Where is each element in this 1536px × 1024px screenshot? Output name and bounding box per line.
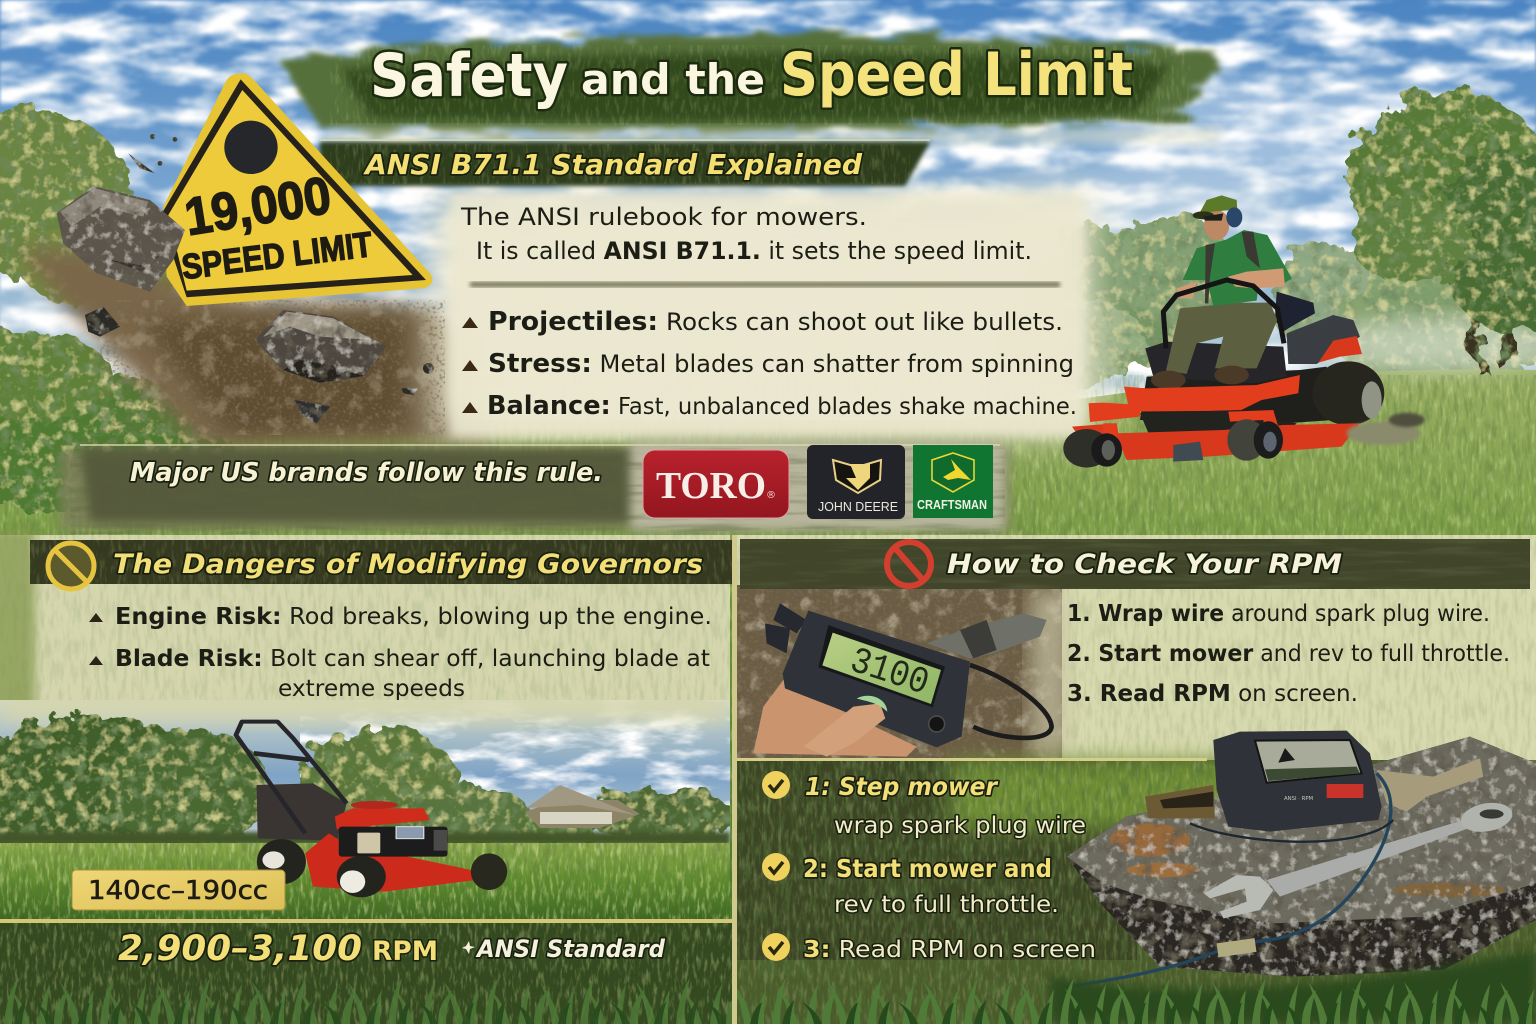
bullet: blade risk xyxy=(89,646,710,702)
bullet: stress: Stress: Metal blades can shatter from spinning xyxy=(488,349,1074,379)
RPM unit: RPM xyxy=(372,936,438,967)
title text: Safety xyxy=(370,41,568,111)
hazy tree line behind rider xyxy=(995,215,1536,390)
thumb xyxy=(803,703,885,757)
bush left xyxy=(0,110,230,510)
warning sign xyxy=(160,73,432,306)
riding mower with operator xyxy=(1063,195,1425,468)
lower-right panel xyxy=(737,758,1536,1024)
logo: John Deere xyxy=(807,445,905,519)
big tree top right xyxy=(1350,90,1536,370)
slab with tools xyxy=(1060,731,1536,988)
check item 2: 2: Start mower and xyxy=(803,854,1052,883)
check item 2: rev to full throttle. xyxy=(834,892,1059,918)
test cable xyxy=(1060,773,1391,988)
ground lawn right xyxy=(0,317,1536,1024)
logo: Toro: TORO xyxy=(656,465,766,507)
handheld tachometer xyxy=(753,603,1052,757)
wrench xyxy=(1204,799,1515,918)
steering bars xyxy=(1163,280,1284,348)
slab xyxy=(1067,737,1536,977)
check item 2 xyxy=(762,853,1059,918)
ANSI subheading banner xyxy=(320,139,930,186)
ANSI standard tag: ANSI Standard xyxy=(475,935,666,963)
logo: John Deere: JOHN DEERE xyxy=(818,499,898,514)
cut grass spray xyxy=(1347,413,1425,445)
flying rocks xyxy=(57,134,434,423)
sign number: 19,000 xyxy=(181,166,335,247)
main cream panel xyxy=(100,128,1220,437)
rear wheel xyxy=(1312,361,1384,425)
rear chassis shadow xyxy=(1140,367,1333,423)
spark plug connector xyxy=(765,603,1047,658)
step 3: 3. Read RPM on screen. xyxy=(1067,681,1358,707)
RPM header banner xyxy=(740,539,1530,589)
logo: Craftsman xyxy=(913,445,993,518)
check item 1: wrap spark plug wire xyxy=(834,813,1086,839)
brands strip xyxy=(60,440,1010,534)
bullet: projectiles: Projectiles: Rocks can shoot out like bullets. xyxy=(488,307,1063,337)
meter reading: 3100 xyxy=(845,641,934,705)
bottom grass strip xyxy=(737,950,1536,1024)
logo: Toro: ® xyxy=(766,490,776,501)
check item 1: 1: Step mower xyxy=(805,772,999,801)
house xyxy=(525,785,640,828)
sky background xyxy=(0,0,1536,640)
logo: Toro xyxy=(643,450,789,518)
meter photo backdrop xyxy=(737,585,1070,760)
title highlight text: Speed Limit xyxy=(780,40,1133,110)
title connector text: and the xyxy=(581,55,765,104)
dirt slope behind rocks xyxy=(20,249,490,445)
operator xyxy=(1151,195,1292,389)
seat and engine body xyxy=(1145,292,1362,383)
capacity badge xyxy=(72,870,285,910)
step 1: 1. Wrap wire around spark plug wire. xyxy=(1067,601,1490,627)
bullet: blade risk: extreme speeds xyxy=(278,676,465,702)
bullet: engine risk: Engine Risk: Rod breaks, blowing up the engine. xyxy=(115,604,712,630)
bullet: balance: Balance: Fast, unbalanced blades shake machine. xyxy=(487,391,1077,421)
panel: how to check RPM xyxy=(737,535,1536,760)
title banner xyxy=(280,35,1225,133)
icon: sparkle xyxy=(462,941,475,954)
meter body xyxy=(783,611,970,747)
scene: walk-behind mower lawn xyxy=(0,690,735,920)
sign caption: SPEED LIMIT xyxy=(180,225,375,287)
check item 3: 3: Read RPM on screen xyxy=(803,937,1096,963)
RPM value: 2,900–3,100 xyxy=(118,929,362,969)
vertical divider xyxy=(732,535,737,1024)
brands caption: Major US brands follow this rule. xyxy=(130,458,603,488)
dangers header banner xyxy=(30,540,732,584)
panel: dangers of modifying governors xyxy=(0,530,732,715)
dangers heading: The Dangers of Modifying Governors xyxy=(113,549,703,580)
RPM heading: How to Check Your RPM xyxy=(947,549,1342,580)
hand behind xyxy=(753,680,917,757)
red frame and deck xyxy=(1072,375,1360,462)
bullet: blade risk: Blade Risk: Bolt can shear off, launching blade at xyxy=(115,646,710,672)
front wheels xyxy=(1063,419,1283,468)
icon: prohibition red xyxy=(887,542,931,586)
lower-left RPM band xyxy=(0,919,732,1024)
capacity badge: 140cc–190cc xyxy=(88,876,268,906)
ANSI intro text: The ANSI rulebook for mowers. xyxy=(460,203,867,231)
check item 3 xyxy=(762,933,1096,963)
walk-behind lawn mower xyxy=(236,722,507,897)
logo: Craftsman: CRAFTSMAN xyxy=(917,498,987,512)
ANSI intro text: It is called ANSI B71.1. it sets the speed limit. xyxy=(476,237,1032,265)
clamp back xyxy=(1145,758,1483,818)
bench meter: ANSI · RPM xyxy=(1284,796,1314,802)
step 2: 2. Start mower and rev to full throttle. xyxy=(1067,641,1510,667)
cable xyxy=(970,665,1052,738)
bench meter xyxy=(1213,731,1382,832)
check item 1 xyxy=(762,771,1086,839)
checklist xyxy=(762,771,1096,963)
ANSI intro text xyxy=(460,203,1032,265)
ANSI subheading text: ANSI B71.1 Standard Explained xyxy=(363,148,863,181)
icon: prohibition yellow xyxy=(48,543,94,589)
